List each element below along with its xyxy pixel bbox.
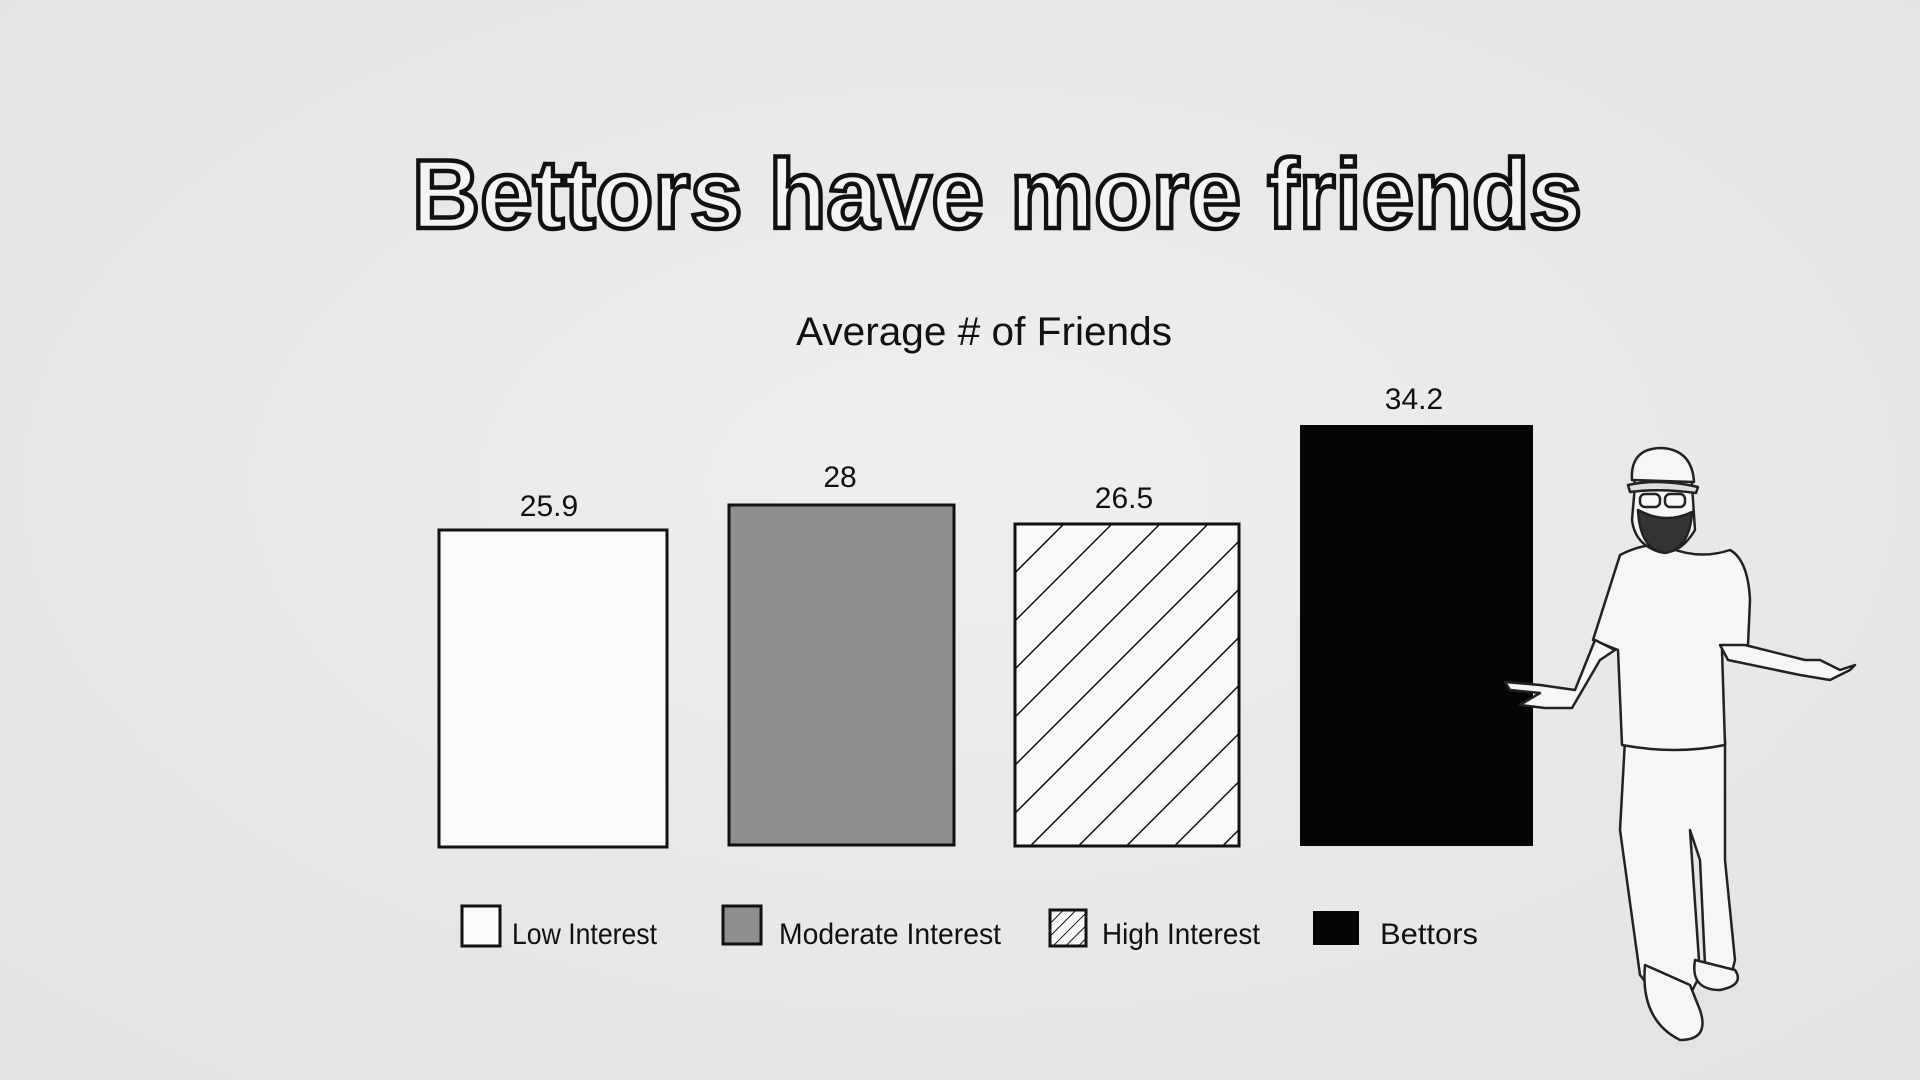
legend: Low Interest — [462, 906, 658, 951]
shoes — [1644, 965, 1702, 1040]
legend: Bettors: Bettors — [1380, 918, 1478, 951]
glasses — [1640, 494, 1685, 507]
title: Bettors have more friends — [412, 139, 1582, 249]
legend: Bettors — [1313, 911, 1478, 951]
subtitle: Average # of Friends: Average # of Friends — [796, 310, 1172, 354]
cap — [1632, 448, 1694, 482]
bar: Low Interest 25.9 — [439, 490, 667, 847]
bar: Bettors 34.2: 34.2 — [1385, 383, 1443, 416]
torso / shirt — [1593, 545, 1750, 750]
bar: High Interest 26.5 — [1015, 482, 1239, 846]
legend: Moderate Interest — [723, 906, 1002, 951]
right arm — [1720, 645, 1855, 680]
left arm (pointing to bar) — [1505, 640, 1615, 708]
legend: High Interest — [1050, 910, 1261, 951]
illustration: presenter figure — [1505, 448, 1855, 1040]
bar: Low Interest 25.9: 25.9 — [520, 490, 578, 523]
bar: Bettors 34.2 — [1300, 383, 1533, 846]
legend: High Interest: High Interest — [1102, 918, 1261, 951]
beard — [1638, 510, 1692, 553]
head — [1632, 455, 1695, 552]
legend: Moderate Interest: Moderate Interest — [779, 918, 1002, 951]
bar chart — [439, 383, 1533, 847]
bar: High Interest 26.5: 26.5 — [1095, 482, 1153, 515]
legend: Low Interest: Low Interest — [512, 918, 658, 951]
bar: Moderate Interest 28: 28 — [823, 461, 857, 494]
legs — [1620, 740, 1735, 1000]
legend — [462, 906, 1478, 951]
bar: Moderate Interest 28 — [729, 461, 954, 845]
